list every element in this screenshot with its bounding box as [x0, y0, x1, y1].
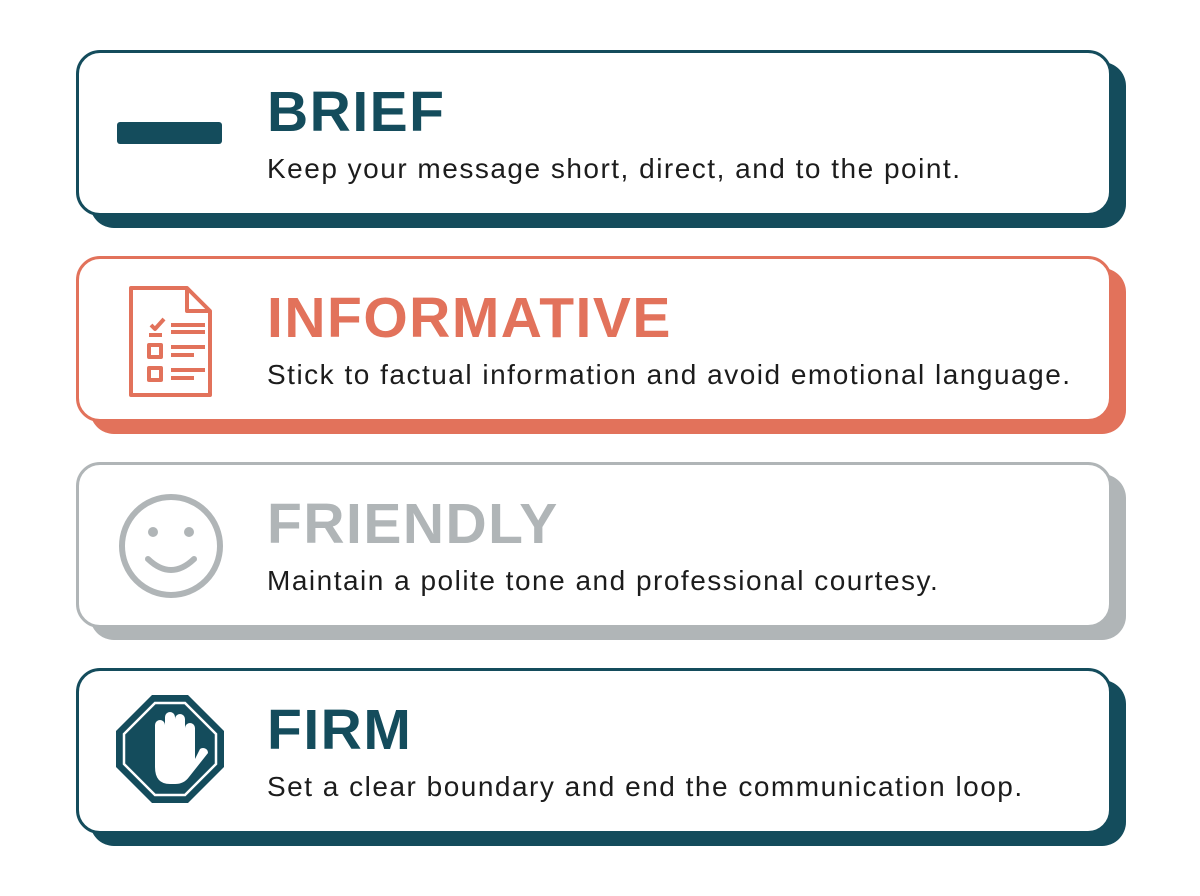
text: firm: Set a clear boundary and end the communication loop.	[267, 771, 1024, 802]
panel: informative	[76, 256, 1112, 422]
text: informative: Stick to factual information and avoid emotional language.	[267, 359, 1072, 390]
heading: firm: FIRM	[267, 698, 412, 762]
icon: stop hand	[116, 695, 224, 803]
panel: firm	[76, 668, 1112, 834]
panel: friendly	[76, 462, 1112, 628]
icon: dash	[117, 122, 222, 144]
icon: document checklist	[129, 286, 212, 397]
text: brief: Keep your message short, direct, and to the point.	[267, 153, 961, 184]
heading: brief: BRIEF	[267, 80, 446, 144]
icon: smiley	[119, 494, 223, 598]
text: friendly: Maintain a polite tone and professional courtesy.	[267, 565, 939, 596]
heading: informative: INFORMATIVE	[267, 286, 672, 350]
panel: brief	[76, 50, 1112, 216]
heading: friendly: FRIENDLY	[267, 492, 559, 556]
